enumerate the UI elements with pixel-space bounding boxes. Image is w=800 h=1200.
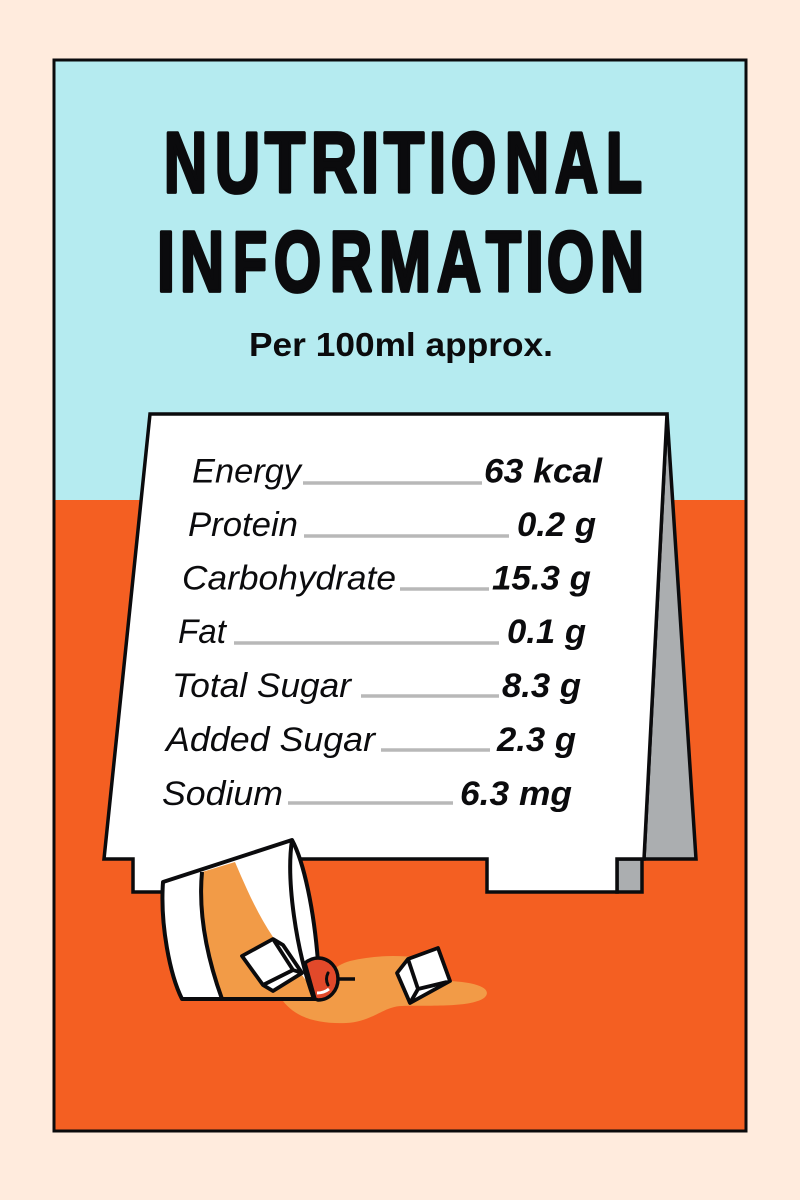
nutrition rows <box>162 452 604 813</box>
title: O <box>547 215 594 310</box>
illustration: spilled drink <box>283 956 487 1023</box>
title: O <box>274 215 321 310</box>
cup rim <box>290 840 314 999</box>
cup liquid <box>202 862 312 999</box>
row: added sugar: Added Sugar <box>164 721 377 759</box>
title <box>157 116 644 310</box>
title: T <box>486 215 521 310</box>
row: fat: Fat <box>178 613 228 651</box>
row: carbohydrate <box>182 560 591 598</box>
title: I <box>525 215 544 310</box>
row: carbohydrate: Carbohydrate <box>182 560 396 598</box>
row: protein <box>188 506 596 544</box>
cherry <box>305 958 355 1000</box>
card front <box>104 414 667 892</box>
illustration: tipped cup <box>162 840 355 1000</box>
title: T <box>384 116 424 211</box>
title: N <box>600 215 644 310</box>
card back tab <box>617 859 642 892</box>
title: T <box>265 116 305 211</box>
panel: table background <box>54 500 746 1131</box>
card back panel <box>644 414 696 859</box>
icon: sugar cube on table <box>397 948 450 1003</box>
row: carbohydrate: 15.3 g <box>492 560 591 598</box>
row: protein: Protein <box>188 506 298 544</box>
title: F <box>233 215 267 310</box>
title: I <box>157 215 175 310</box>
title: N <box>180 215 224 310</box>
cup outline <box>162 840 318 999</box>
title: R <box>330 215 372 310</box>
row: fat: 0.1 g <box>507 613 586 651</box>
row: fat <box>178 613 586 651</box>
title: M <box>379 215 431 310</box>
row: protein: 0.2 g <box>517 506 596 544</box>
panel: sky background <box>54 60 746 500</box>
title: A <box>437 215 481 310</box>
frame <box>54 60 746 1131</box>
subtitle: Per 100ml approx. <box>249 327 553 364</box>
icon: sugar cube in cup <box>242 939 302 991</box>
row: sodium: Sodium <box>162 775 283 813</box>
cup body <box>162 840 318 999</box>
title: N <box>164 116 207 211</box>
row: energy <box>192 452 604 490</box>
title: O <box>451 116 496 211</box>
title: I <box>361 116 379 211</box>
row: added sugar <box>164 721 576 759</box>
panel: tent card <box>104 414 696 892</box>
title: U <box>215 116 260 211</box>
row: total sugar: Total Sugar <box>172 667 353 705</box>
title: N <box>505 116 549 211</box>
row: total sugar: 8.3 g <box>502 667 581 705</box>
title: R <box>311 116 357 211</box>
row: added sugar: 2.3 g <box>496 721 576 759</box>
title: A <box>555 116 598 211</box>
row: total sugar <box>172 667 581 705</box>
row: energy: 63 kcal <box>484 452 604 490</box>
row: sodium: 6.3 mg <box>460 775 572 813</box>
row: energy: Energy <box>192 452 303 490</box>
title: L <box>606 116 642 211</box>
row: sodium <box>162 775 572 813</box>
cup stripe <box>201 872 222 999</box>
title: I <box>429 116 446 211</box>
